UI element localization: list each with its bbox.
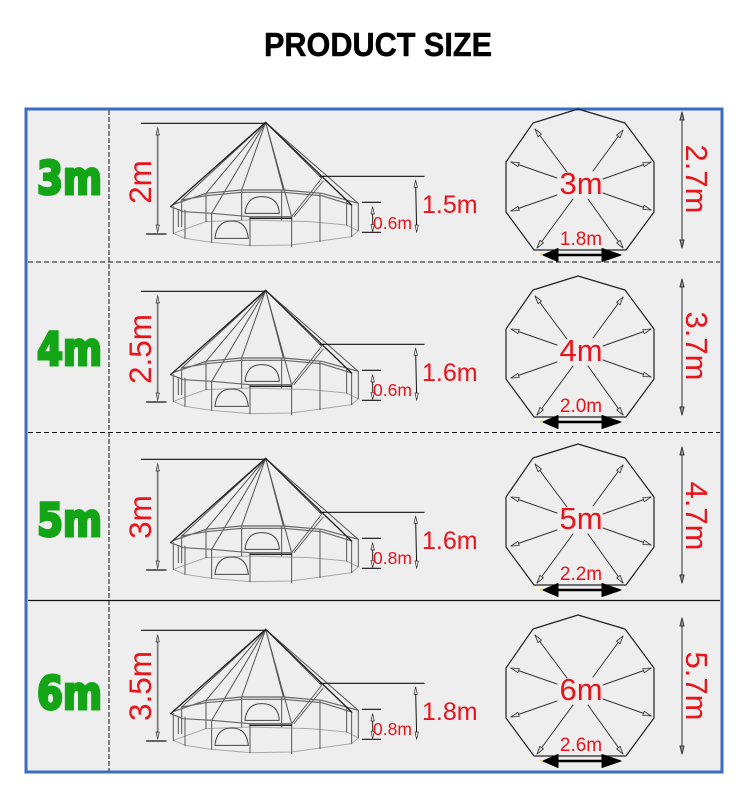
row: 6m <box>37 615 714 768</box>
tent floor plan 6m: 6m <box>559 672 603 707</box>
tent floor plan 6m: 2.6m <box>560 735 602 756</box>
title: PRODUCT SIZE <box>264 26 492 63</box>
tent floor plan 5m: 2.2m <box>560 564 602 585</box>
tent side view 5m: 3m <box>122 495 158 539</box>
size label 3m: 3m <box>37 152 102 205</box>
tent side view 4m: 0.6m <box>373 380 412 400</box>
tent floor plan 3m: 3m <box>559 166 603 201</box>
tent side view 5m: 1.6m <box>422 527 478 555</box>
panel: size table <box>26 109 722 772</box>
tent side view 6m: 0.8m <box>373 719 412 739</box>
tent floor plan 4m: 2.0m <box>560 396 602 417</box>
tent side view 6m: 1.8m <box>422 698 478 726</box>
tent side view 3m: 1.5m <box>422 191 478 219</box>
row: 3m <box>37 109 714 262</box>
tent side view 6m <box>122 629 478 754</box>
tent floor plan 3m <box>506 109 714 262</box>
size label 6m: 6m <box>37 667 102 720</box>
tent floor plan 4m <box>506 276 714 428</box>
tent floor plan 5m <box>506 444 714 596</box>
tent floor plan 3m: 2.7m <box>679 145 714 213</box>
tent side view 4m: 1.6m <box>422 359 478 387</box>
tent side view 3m <box>122 122 478 247</box>
tent side view 5m <box>122 458 478 583</box>
tent floor plan 6m: 5.7m <box>679 652 714 720</box>
tent floor plan 4m: 3.7m <box>679 312 714 380</box>
tent floor plan 5m: 4.7m <box>679 482 714 550</box>
row: 5m <box>37 444 714 596</box>
row: 4m <box>37 276 714 428</box>
tent side view 3m: 2m <box>122 160 158 204</box>
tent side view 3m: 0.6m <box>373 213 412 233</box>
tent floor plan 4m: 4m <box>559 333 603 368</box>
tent side view 5m: 0.8m <box>373 548 412 568</box>
size label 5m: 5m <box>37 494 102 547</box>
tent side view 6m: 3.5m <box>122 651 158 721</box>
tent floor plan 5m: 5m <box>559 501 603 536</box>
tent side view 4m <box>122 290 478 415</box>
size label 4m: 4m <box>37 323 102 376</box>
tent side view 4m: 2.5m <box>122 314 158 384</box>
tent floor plan 3m: 1.8m <box>560 229 602 250</box>
tent floor plan 6m <box>506 615 714 768</box>
